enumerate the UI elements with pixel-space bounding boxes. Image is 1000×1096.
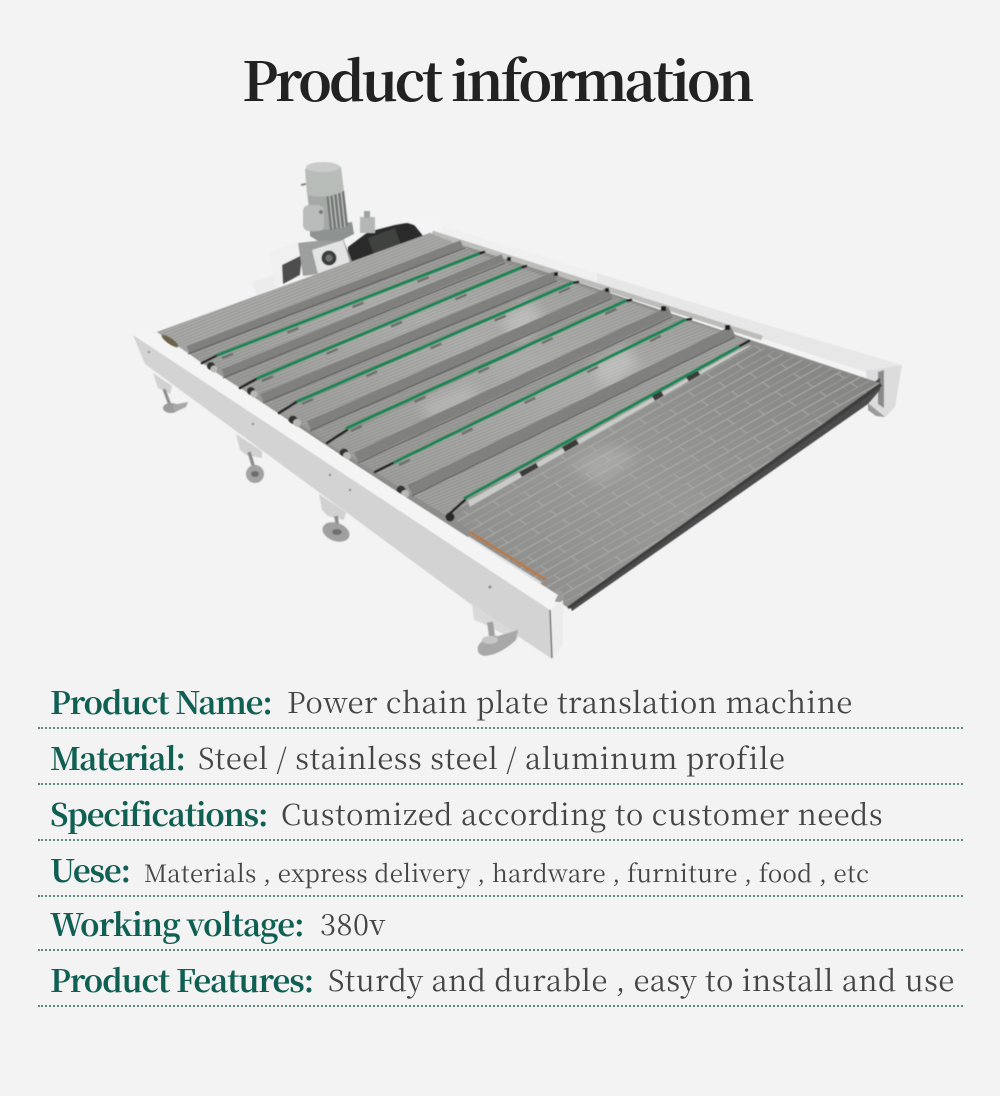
spec row: product features [38,955,963,1007]
spec row: uses: Materials , express delivery , hardware , furniture , food , etc [144,854,869,889]
conveyor bed [157,233,882,611]
spec row: specifications: Customized according to customer needs [281,793,883,834]
near roller of wide belt [446,512,454,522]
far beam end cap [402,215,442,229]
far end black brackets [507,257,730,330]
dark carriers under green strips [222,258,685,465]
spec row: specifications [38,789,963,841]
adjustable feet [153,373,520,656]
spec row: material [38,733,963,785]
motor cap [305,164,344,197]
chain lanes [157,233,750,516]
spec row: product name [38,677,963,729]
reflective highlights [420,300,640,420]
flange [310,222,354,241]
dark secondary motor [347,222,423,270]
spec row: product name: Product Name: [50,678,272,723]
spec row: uses: Uese: [50,846,130,891]
thin gaps between lanes [188,248,735,496]
steel side plate beside wide belt [468,345,754,514]
wide flat belt [452,345,882,611]
spec row: working voltage: 380v [320,903,386,944]
far ledge [432,233,762,338]
motor side housing [303,205,324,231]
near end rollers [160,333,409,498]
green chain guide strips [202,252,749,516]
rounded dark side bands [188,244,733,490]
spec row: material: Steel / stainless steel / aluminum profile [198,737,785,778]
far side frame beam [440,226,902,417]
gearbox and plate [298,238,352,276]
spec row: product name: Power chain plate translation machine [287,681,853,722]
pneumatic unit [360,217,375,233]
spec row: material: Material: [50,734,185,779]
near side frame beam [133,330,563,659]
spec row: product features: Sturdy and durable , easy to install and use [328,959,955,1000]
lower white bracket [252,275,280,296]
spec row: specifications: Specifications: [50,790,267,835]
copper strip at belt end [470,532,546,580]
spec row: working voltage: Working voltage: [50,900,304,945]
foot 4 [472,604,520,656]
spec row: product features: Product Features: [50,956,313,1001]
product image: conveyor machine [133,162,902,659]
ribbed motor body [307,190,348,232]
title: Product information [242,40,752,117]
foot 2 [236,434,264,483]
foot 1 [153,373,188,413]
spec row: working voltage [38,899,963,951]
drive motor assembly [252,162,442,296]
spec row: uses [38,845,963,897]
white side bracket [270,242,302,286]
foot 3 [319,494,352,545]
